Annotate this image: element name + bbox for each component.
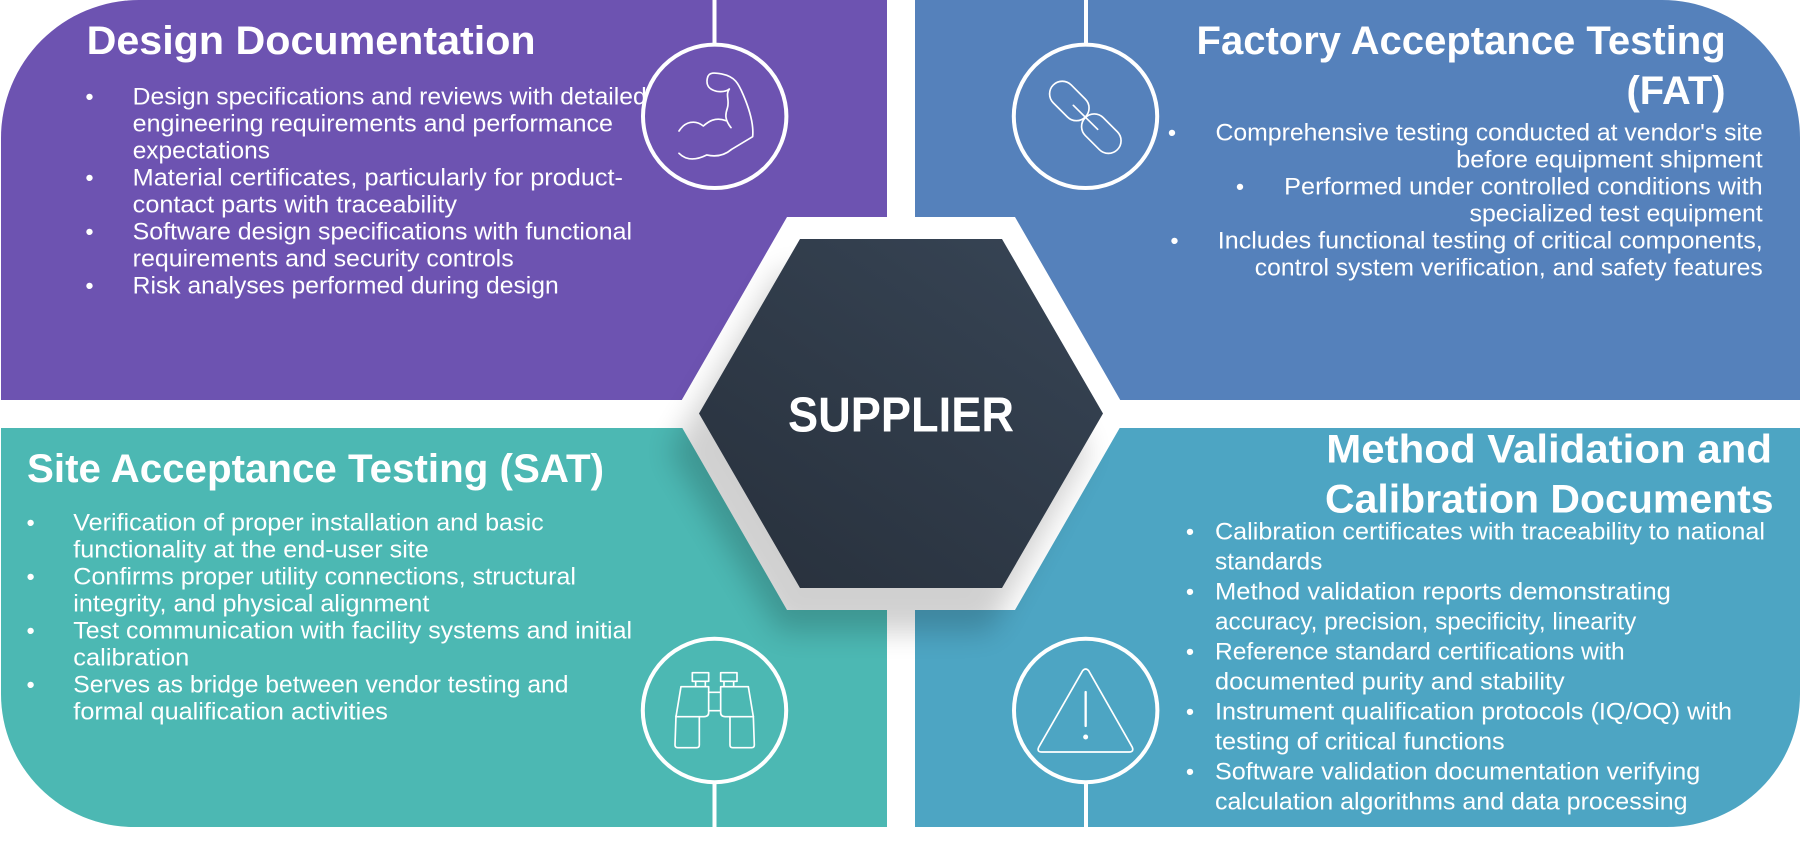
bullets: design documentation: Design specifications and reviews with detailed: [133, 83, 647, 110]
connector and circle: site acceptance testing: [643, 639, 786, 827]
bullets: method validation and calibration documents: documented purity and stability: [1215, 668, 1565, 695]
bullets: site acceptance testing: Serves as bridge between vendor testing and: [73, 671, 569, 698]
bullets: site acceptance testing: •: [26, 563, 35, 589]
text: site acceptance testing: [26, 447, 632, 725]
bullets: method validation and calibration documents: accuracy, precision, specificity, linearity: [1215, 608, 1637, 635]
central hexagon: [699, 239, 1103, 588]
heading: site acceptance testing: Site Acceptance Testing (SAT): [27, 447, 604, 491]
bullets: design documentation: requirements and security controls: [133, 245, 514, 272]
bullets: site acceptance testing: •: [26, 671, 35, 697]
bullets: design documentation: [85, 83, 647, 299]
bullets: design documentation: •: [85, 218, 94, 244]
bullets: design documentation: Risk analyses performed during design: [133, 272, 559, 299]
bullets: site acceptance testing: Verification of proper installation and basic: [73, 509, 544, 536]
bullets: site acceptance testing: •: [26, 509, 35, 535]
bullets: site acceptance testing: Test communication with facility systems and initial: [73, 617, 632, 644]
bullets: site acceptance testing: Confirms proper utility connections, structural: [73, 563, 576, 590]
bullets: design documentation: •: [85, 164, 94, 190]
connector and circle: design documentation: [643, 0, 786, 188]
bullets: method validation and calibration documents: Reference standard certifications with: [1215, 638, 1625, 665]
bullets: factory acceptance testing: before equipment shipment: [1456, 146, 1763, 173]
bullets: method validation and calibration documents: •: [1186, 578, 1194, 604]
bullets: design documentation: Material certificates, particularly for product-: [133, 164, 623, 191]
bullets: factory acceptance testing: •: [1236, 173, 1244, 199]
bullets: method validation and calibration documents: Method validation reports demonstrating: [1215, 578, 1671, 605]
bullets: design documentation: engineering requirements and performance: [133, 110, 613, 137]
text: factory acceptance testing: [1168, 19, 1763, 281]
text: method validation and calibration documents: [1186, 428, 1774, 815]
bullets: method validation and calibration documents: Calibration certificates with traceability to national: [1215, 518, 1765, 545]
bullets: site acceptance testing: formal qualification activities: [73, 698, 388, 725]
bullets: design documentation: •: [85, 83, 94, 109]
panel: method validation background: [915, 428, 1800, 827]
panel: factory acceptance testing background: [915, 0, 1800, 400]
bullets: factory acceptance testing: •: [1170, 227, 1179, 253]
bullets: site acceptance testing: functionality at the end-user site: [73, 536, 429, 563]
heading: design documentation: Design Documentation: [87, 19, 536, 63]
bullets: method validation and calibration documents: •: [1186, 518, 1194, 544]
bullets: factory acceptance testing: specialized test equipment: [1470, 200, 1763, 227]
bullets: factory acceptance testing: [1168, 119, 1763, 281]
heading: method validation and calibration documents: Method Validation and: [1326, 428, 1772, 472]
bullets: method validation and calibration documents: [1186, 518, 1765, 815]
bullets: site acceptance testing: •: [26, 617, 35, 643]
heading: factory acceptance testing: [1196, 19, 1726, 113]
connector and circle: factory acceptance testing: [1014, 0, 1157, 188]
bullets: design documentation: expectations: [133, 137, 270, 164]
bullets: design documentation: •: [85, 272, 94, 298]
bullets: method validation and calibration documents: •: [1186, 698, 1194, 724]
bullets: site acceptance testing: [26, 509, 632, 725]
icon: chain link: [1044, 76, 1126, 159]
bullets: design documentation: Software design specifications with functional: [133, 218, 632, 245]
bullets: method validation and calibration documents: Software validation documentation verifying: [1215, 758, 1700, 785]
icon: binoculars: [675, 673, 754, 748]
bullets: method validation and calibration documents: calculation algorithms and data processing: [1215, 788, 1688, 815]
connector and circle: method validation: [1014, 639, 1157, 827]
hexagon soft shadow: [670, 272, 1088, 632]
bullets: method validation and calibration documents: •: [1186, 638, 1194, 664]
heading: factory acceptance testing: Factory Acceptance Testing: [1196, 19, 1726, 63]
bullets: method validation and calibration documents: •: [1186, 758, 1194, 784]
bullets: site acceptance testing: integrity, and physical alignment: [73, 590, 430, 617]
heading: method validation and calibration documents: [1325, 428, 1774, 522]
bullets: design documentation: contact parts with traceability: [133, 191, 458, 218]
icon: flexed muscle: [679, 73, 753, 159]
bullets: factory acceptance testing: Comprehensive testing conducted at vendor's site: [1216, 119, 1763, 146]
center label: SUPPLIER: SUPPLIER: [788, 388, 1014, 442]
bullets: factory acceptance testing: Includes functional testing of critical components,: [1218, 227, 1763, 254]
bullets: method validation and calibration documents: testing of critical functions: [1215, 728, 1505, 755]
panel: design documentation background: [1, 0, 887, 400]
bullets: method validation and calibration documents: standards: [1215, 548, 1322, 575]
bullets: factory acceptance testing: Performed under controlled conditions with: [1284, 173, 1763, 200]
hexagon outer white ring: [674, 217, 1128, 610]
text: design documentation: [85, 19, 647, 299]
heading: method validation and calibration documents: Calibration Documents: [1325, 478, 1774, 522]
bullets: factory acceptance testing: •: [1168, 119, 1176, 145]
bullets: site acceptance testing: calibration: [73, 644, 189, 671]
panel: site acceptance testing background: [1, 428, 887, 827]
bullets: factory acceptance testing: control system verification, and safety features: [1255, 254, 1763, 281]
heading: factory acceptance testing: (FAT): [1626, 69, 1726, 113]
bullets: method validation and calibration documents: Instrument qualification protocols (IQ/OQ) with: [1215, 698, 1732, 725]
icon: warning triangle: [1038, 669, 1133, 752]
